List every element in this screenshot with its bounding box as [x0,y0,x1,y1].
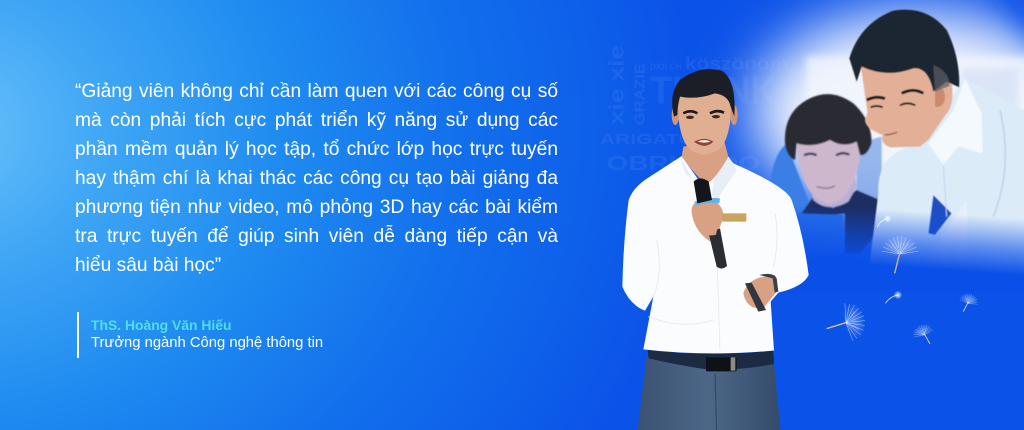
trousers [637,357,781,430]
quote text: hiểu sâu bài học” [75,255,221,276]
word cloud [600,45,788,175]
face [677,87,732,154]
hand with microphone [692,199,724,243]
attribution with vertical bar: Trưởng ngành Công nghệ thông tin [91,335,323,351]
word cloud: xie xie [605,45,628,125]
quote text: tra trực tuyến để giúp sinh viên dễ dàng tiếp cận và [75,226,558,247]
quote text [75,81,558,276]
attribution with vertical bar [77,312,379,358]
light background glow [750,10,1024,217]
student [770,94,882,260]
teacher leaning [849,10,1024,287]
quote text: phần mềm quản lý học tập, tổ chức lớp học trực tuyến [75,139,558,160]
word cloud: ARIGATOU [600,132,710,148]
quote text: mà còn phải tích cực phát triển kỹ năng sử dụng các [75,110,558,131]
hand with remote [743,275,777,308]
neck [682,140,728,185]
word cloud: DIOLCH [650,61,682,71]
quote text: hay thậm chí là khai thác các công cụ tạo bài giảng đa [75,168,558,189]
belt [648,350,774,370]
quote text: “Giảng viên không chỉ cần làm quen với các công cụ số [75,81,558,102]
attribution with vertical bar: ThS. Hoàng Văn Hiếu [91,317,231,333]
word cloud: GRAZIE [633,63,649,125]
name badge [722,213,746,222]
fade of the photo into blue [767,207,1024,293]
word cloud: THANK [650,68,777,112]
dandelions [827,215,980,344]
quote text: phương tiện như video, mô phỏng 3D hay các bài kiểm [75,197,558,218]
shirt [622,156,809,353]
word cloud: OBRIGADO [607,152,760,175]
word cloud: köszönöm [685,53,788,73]
speaker [622,69,809,430]
top right corner shading [983,0,1024,43]
hair [672,69,735,117]
